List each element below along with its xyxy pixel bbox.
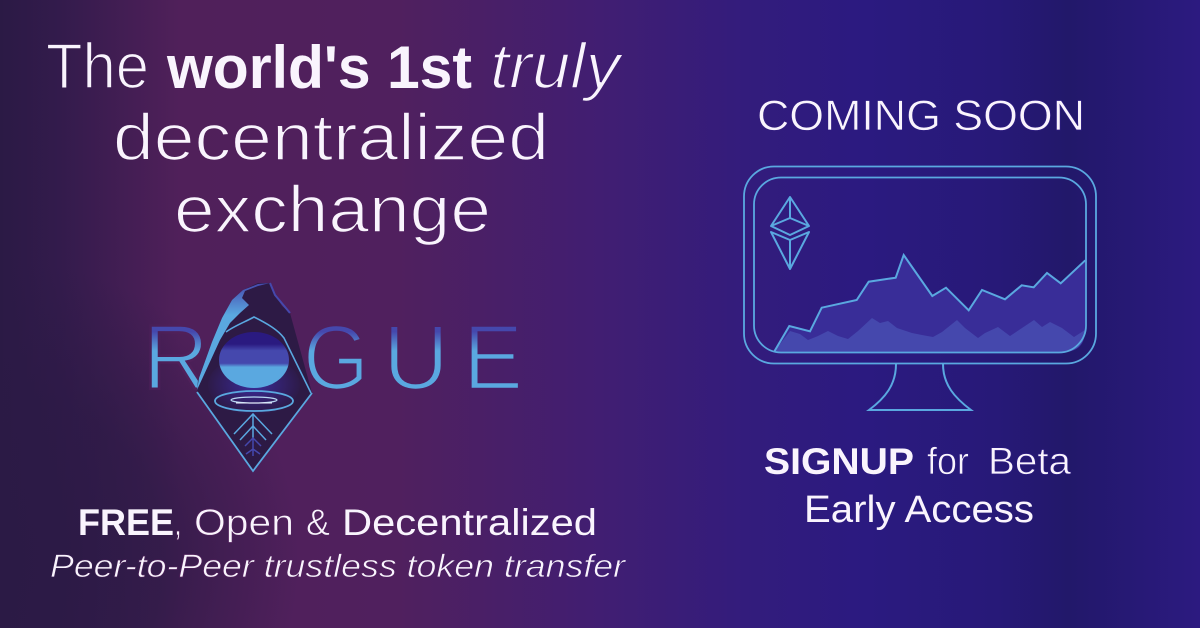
tagline: Decentralized (342, 502, 597, 543)
logo wordmark: G (303, 307, 369, 409)
icon: ethereum (771, 197, 809, 269)
hood light edge (197, 283, 270, 390)
monitor illustration (744, 166, 1096, 410)
chart area upper (774, 255, 1085, 352)
signup call to action: Early Access (804, 489, 1034, 531)
signup call to action: Beta (988, 441, 1072, 483)
logo hood (197, 283, 312, 471)
hood inner arc (226, 317, 311, 393)
title: exchange (174, 172, 491, 246)
rune emblem (234, 414, 272, 456)
chart line (774, 255, 1085, 352)
title: world's 1st (166, 34, 472, 101)
chart area lower (774, 318, 1085, 352)
scrying ring (215, 391, 293, 411)
signup call to action: SIGNUP (764, 441, 914, 482)
price chart (774, 255, 1085, 352)
monitor outer frame (744, 166, 1096, 364)
logo wordmark: E (463, 307, 523, 409)
crystal glow (208, 355, 300, 415)
monitor screen frame (754, 178, 1086, 352)
title: The (46, 30, 149, 102)
diamond outline (197, 392, 312, 471)
tagline: & (306, 502, 330, 543)
tagline (78, 502, 597, 543)
monitor stand (869, 364, 971, 410)
coming soon heading: COMING SOON (757, 92, 1085, 140)
tagline: FREE (78, 502, 174, 543)
logo: ROGUE (143, 283, 523, 471)
logo wordmark: U (383, 307, 449, 409)
crystal sphere (219, 332, 289, 388)
logo wordmark (143, 307, 523, 409)
title: truly (490, 30, 624, 102)
subtagline: Peer-to-Peer trustless token transfer (50, 548, 626, 584)
title (46, 30, 624, 246)
signup call to action (764, 441, 1072, 531)
tagline: Open (194, 502, 294, 543)
tagline: , (174, 502, 182, 543)
signup call to action: for (927, 441, 969, 483)
title: decentralized (113, 100, 549, 174)
logo wordmark: R (143, 307, 209, 409)
